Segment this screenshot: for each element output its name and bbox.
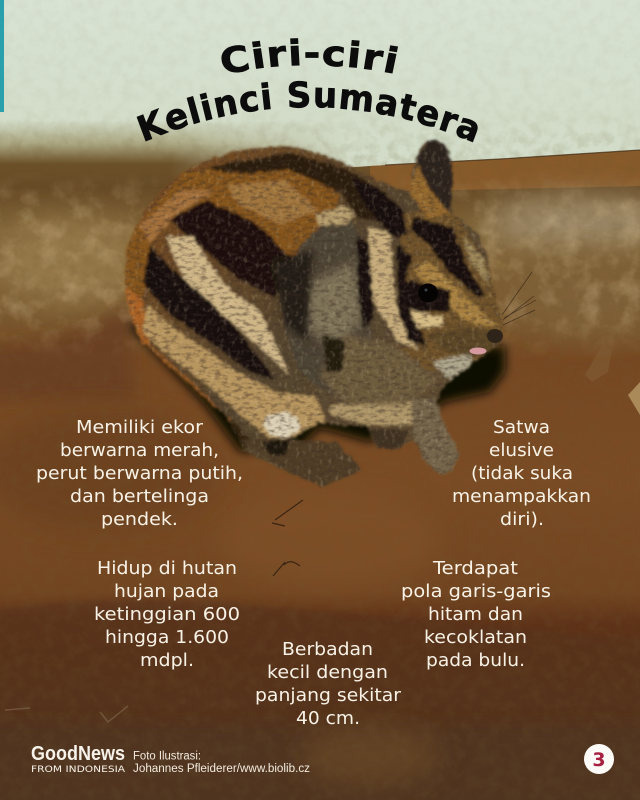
rabbit: tan back patches [225, 180, 318, 225]
text block: elusive: menampakkan [452, 486, 591, 507]
page number badge: 3 [592, 749, 606, 771]
rabbit: front ear dark [350, 177, 409, 238]
text block: tail, belly, ears: perut berwarna putih, [36, 463, 243, 484]
rabbit: pale forehead edge [463, 237, 490, 287]
rabbit: whiskers [502, 272, 536, 325]
rabbit: upper black stripe [170, 200, 295, 298]
rabbit: body silhouette [125, 140, 503, 487]
text block: tail, belly, ears: berwarna merah, [60, 440, 219, 461]
rabbit: dark neck line [357, 235, 373, 328]
rabbit: hind foot [240, 438, 362, 487]
text block: fur pattern: pola garis-garis [401, 581, 551, 602]
text block: habitat: Hidup di hutan [97, 558, 237, 579]
text block: tail, belly, ears: dan bertelinga [70, 486, 209, 507]
text block: fur pattern: Terdapat [432, 558, 518, 579]
text block: habitat: hingga 1.600 [105, 627, 229, 648]
text block: body size: 40 cm. [296, 708, 360, 729]
rabbit: lower pale belly [142, 305, 325, 443]
text block: habitat: mdpl. [140, 650, 194, 671]
text block: fur pattern: hitam dan [428, 604, 523, 625]
text block: habitat [94, 558, 240, 671]
rabbit: mid body grey fur [296, 222, 370, 390]
page number badge [584, 744, 614, 774]
title line 1: Ciri-ciri [216, 32, 402, 82]
rabbit: eye [418, 284, 438, 302]
text block: elusive: elusive [489, 440, 554, 461]
rabbit: ear back [414, 138, 456, 214]
text block: fur pattern [401, 558, 551, 671]
photo credit: Johannes Pfleiderer/www.biolib.cz [133, 763, 310, 775]
rabbit [120, 138, 505, 487]
text block: body size: panjang sekitar [255, 685, 402, 706]
logo: GoodNews from Indonesia: FROM INDONESIA [31, 765, 126, 775]
rabbit: nose and tongue [470, 329, 503, 354]
title [132, 32, 486, 151]
text block: elusive: Satwa [493, 417, 550, 438]
text block: body size [255, 639, 402, 729]
text block: elusive: diri). [500, 509, 544, 530]
text block: fur pattern: kecoklatan [424, 627, 527, 648]
logo: GoodNews from Indonesia [31, 743, 126, 775]
photo credit: Foto Ilustrasi: [133, 750, 201, 762]
text block: tail, belly, ears: Memiliki ekor [76, 417, 204, 438]
text block: fur pattern: pada bulu. [426, 650, 525, 671]
rabbit: lower body tan-grey [320, 335, 440, 405]
text block: elusive [452, 417, 591, 530]
rabbit: dark dorsal band [205, 152, 395, 225]
rabbit: pale flank stripe [165, 236, 290, 375]
text block: tail, belly, ears [36, 417, 243, 530]
logo: GoodNews from Indonesia: GoodNews [31, 743, 125, 765]
rabbit: tan head stripe [413, 260, 500, 327]
teal corner mark [0, 0, 4, 112]
rabbit: muzzle [425, 328, 503, 356]
rabbit: dark stripe behind eye [397, 243, 450, 345]
rabbit: forehead dark band [410, 217, 487, 297]
photo credit [133, 750, 310, 775]
text block: body size: kecil dengan [267, 662, 388, 683]
rabbit: rusty rump [123, 168, 340, 298]
shadow under rabbit [128, 320, 505, 452]
text block: body size: Berbadan [282, 639, 373, 660]
text block: habitat: hujan pada [114, 581, 219, 602]
text block: tail, belly, ears: pendek. [101, 509, 178, 530]
title line 2: Kelinci Sumatera [132, 75, 486, 151]
rabbit: front paw [412, 397, 460, 475]
rabbit: lower black stripe [143, 245, 276, 380]
text block: elusive: (tidak suka [471, 463, 573, 484]
rabbit: head [400, 210, 502, 370]
rabbit: fur texture [120, 135, 510, 490]
rabbit: pale under-eye mark [410, 310, 443, 328]
text block: habitat: ketinggian 600 [94, 604, 240, 625]
rabbit: pale neck stripe [368, 227, 417, 350]
